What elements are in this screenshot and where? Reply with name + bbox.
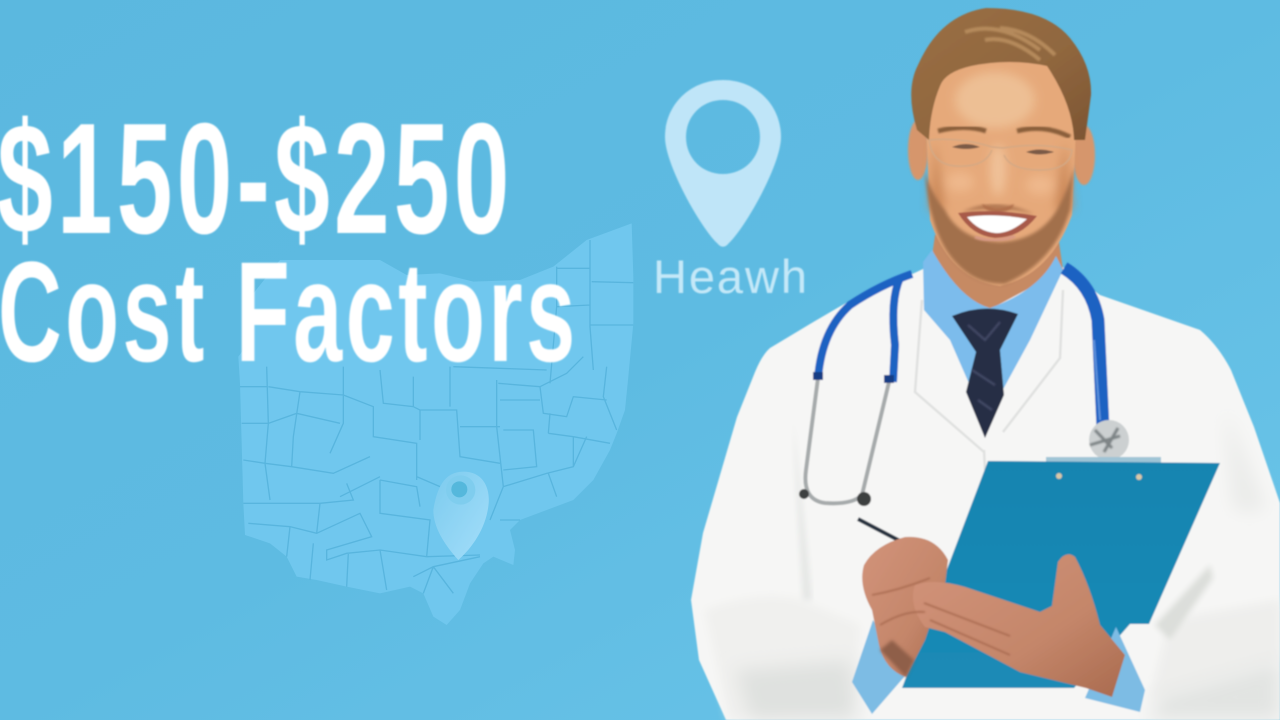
white coat [691, 265, 1280, 720]
title [0, 91, 579, 392]
beard [925, 167, 1074, 284]
mouth and teeth [958, 211, 1037, 240]
doctor illustration [691, 8, 1280, 720]
finger lines [872, 578, 1010, 655]
wrist shadow [880, 640, 914, 677]
tie [952, 308, 1018, 438]
map pin marker [433, 472, 489, 560]
eyebrows [938, 128, 1070, 137]
title line 2: cost factors: Cost Factors [0, 233, 579, 392]
clipboard [902, 461, 1220, 688]
ears [908, 120, 1095, 185]
glasses [929, 139, 1072, 170]
moustache [962, 204, 1034, 214]
pen [858, 519, 900, 541]
hand holding clipboard [913, 554, 1125, 697]
nose shadow [982, 204, 1014, 212]
shirt collar [923, 250, 1063, 420]
eyes [952, 144, 1054, 154]
head [926, 46, 1076, 286]
hand holding pen [862, 537, 948, 677]
clipboard clip [1046, 457, 1161, 463]
title line 1: price range: $150-$250 [0, 91, 514, 268]
logo label: Heawh [653, 250, 807, 303]
coat lapels [915, 290, 1063, 470]
stethoscope chest piece [1089, 420, 1129, 460]
shirt cuffs [852, 620, 1145, 714]
map of Ohio with county lines [238, 223, 633, 625]
hair [911, 8, 1091, 140]
hair highlights [965, 28, 1055, 60]
icon: location pin [665, 80, 781, 247]
stethoscope [799, 268, 1103, 506]
face shading [930, 72, 1072, 210]
neck [930, 235, 1063, 312]
